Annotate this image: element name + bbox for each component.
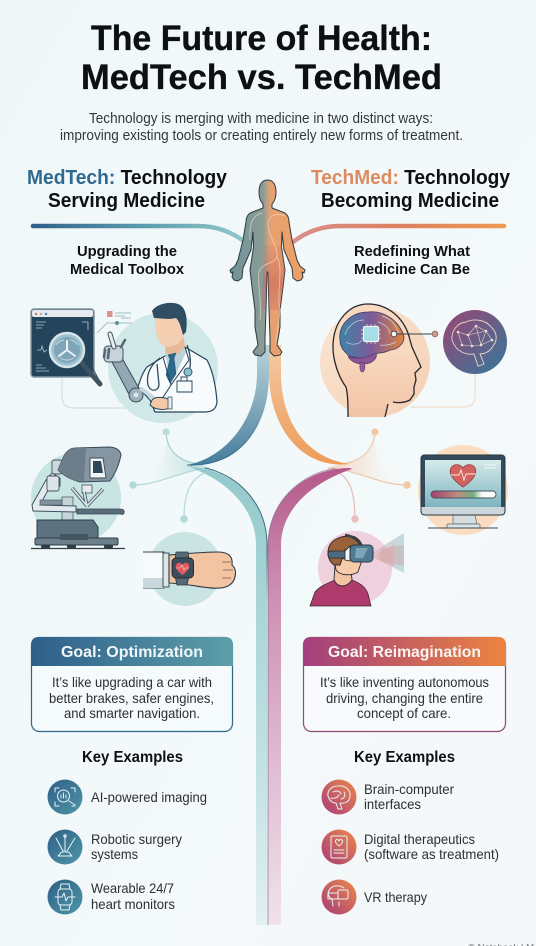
illustration: chart callout <box>97 311 132 333</box>
title: MedTech vs. TechMed <box>81 58 442 97</box>
ribbon: MedTech lower <box>187 466 267 925</box>
icon: brain-computer interface <box>322 780 356 814</box>
illustration: surgical robot <box>31 447 125 548</box>
goal box: TechMed: driving, changing the entire <box>326 690 483 706</box>
illustration: neural network brain <box>411 310 507 407</box>
example: Robotic surgery systems: systems <box>91 846 138 862</box>
goal box: TechMed: concept of care. <box>357 705 451 721</box>
illustration: imaging screen <box>31 309 135 408</box>
key examples heading: TechMed: Key Examples <box>354 749 455 766</box>
title <box>81 19 442 97</box>
subheading: MedTech <box>70 244 184 278</box>
header rule: TechMed <box>293 226 504 242</box>
subheading: TechMed: Medicine Can Be <box>354 262 470 278</box>
subheading: TechMed <box>354 244 470 278</box>
subtitle <box>60 111 463 144</box>
goal box: MedTech: Goal: Optimization <box>61 644 203 661</box>
heading: TechMed: TechMed: Technology <box>311 167 511 189</box>
goal box: TechMed: Goal: Reimagination <box>328 644 481 661</box>
title: The Future of Health: <box>91 19 432 58</box>
example: Digital therapeutics: Digital therapeutics <box>364 831 475 847</box>
human figure <box>230 180 305 356</box>
illustration: head with brain implant <box>320 304 438 417</box>
fan: TechMed branches <box>328 428 411 523</box>
subheading: TechMed: Redefining What <box>354 244 470 260</box>
key examples heading: MedTech: Key Examples <box>82 749 183 766</box>
icon: robotic surgery <box>48 830 82 864</box>
example: Digital therapeutics: (software as treatment) <box>364 846 499 862</box>
example: Wearable 24/7 heart monitors: Wearable 24/7 <box>91 880 174 896</box>
fan: MedTech branches <box>129 428 214 523</box>
example: Wearable 24/7 heart monitors: heart monitors <box>91 896 175 912</box>
example: AI-powered imaging: AI-powered imaging <box>91 789 207 805</box>
heading: MedTech: MedTech: Technology <box>27 167 228 189</box>
ribbon: TechMed lower <box>268 468 352 925</box>
subheading: MedTech: Medical Toolbox <box>70 262 184 278</box>
goal box: TechMed: It’s like inventing autonomous <box>320 674 489 690</box>
goal box: MedTech: It’s like upgrading a car with <box>52 674 212 690</box>
icon: digital therapeutics <box>322 830 356 864</box>
example: Wearable 24/7 heart monitors <box>91 880 175 912</box>
example: Digital therapeutics <box>364 831 499 862</box>
goal box: TechMed <box>303 637 506 732</box>
goal box: MedTech: better brakes, safer engines, <box>49 690 214 706</box>
subheading: MedTech: Upgrading the <box>77 244 177 260</box>
illustration: doctor with robotic arm <box>104 303 218 423</box>
example: Robotic surgery systems: Robotic surgery <box>91 831 182 847</box>
heading: MedTech <box>27 167 228 212</box>
illustration: monitor with heart <box>418 445 508 535</box>
example: Brain-computer interfaces <box>364 781 454 812</box>
subtitle: Technology is merging with medicine in two distinct ways: <box>89 111 433 127</box>
goal box: MedTech <box>31 637 233 732</box>
illustration: wrist with smartwatch <box>143 532 235 606</box>
flow ribbons <box>129 345 411 925</box>
icon: wearable monitor <box>48 880 82 914</box>
ribbon: MedTech upper <box>187 345 269 465</box>
goal box: MedTech: and smarter navigation. <box>64 705 200 721</box>
illustration: VR headset user <box>310 531 404 606</box>
heading: TechMed <box>311 167 511 212</box>
icon: AI imaging <box>48 780 82 814</box>
ribbon: TechMed upper <box>269 345 350 465</box>
subtitle: improving existing tools or creating entirely new forms of treatment. <box>60 128 463 144</box>
example: Brain-computer interfaces: interfaces <box>364 796 421 812</box>
header rule: MedTech <box>33 226 245 242</box>
heading: MedTech: Serving Medicine <box>48 190 205 212</box>
icon: VR therapy <box>322 880 356 914</box>
example: VR therapy: VR therapy <box>364 889 427 905</box>
example: Robotic surgery systems <box>91 831 182 862</box>
example: Brain-computer interfaces: Brain-computer <box>364 781 454 797</box>
heading: TechMed: Becoming Medicine <box>321 190 499 212</box>
